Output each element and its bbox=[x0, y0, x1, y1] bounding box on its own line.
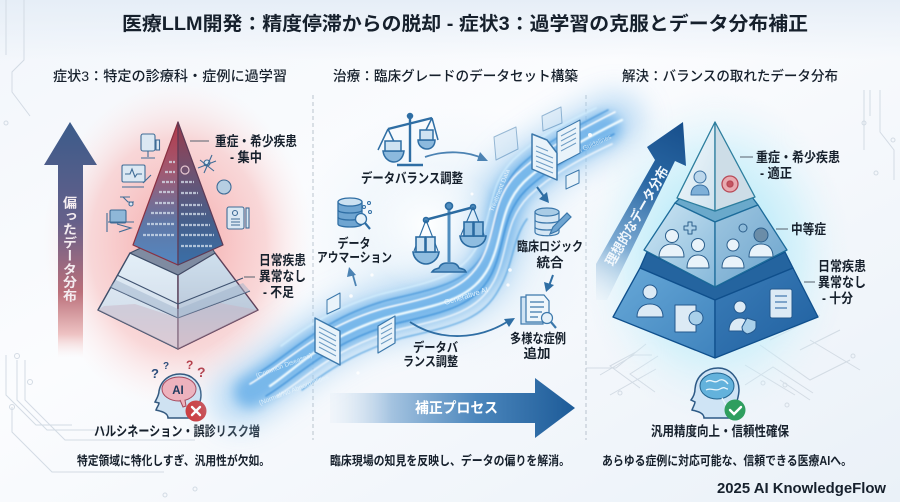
icon: AI brain with error: ? bbox=[163, 361, 169, 372]
label: common diseases balanced: 異常なし bbox=[818, 275, 866, 290]
arrow: skewed data distribution: 偏ったデータ分布 bbox=[62, 195, 78, 303]
arrow: document to logic bbox=[537, 187, 549, 203]
arrow: flow to cases bbox=[410, 318, 515, 336]
arrow: logic to cases bbox=[544, 275, 554, 292]
cyan glow bbox=[580, 90, 850, 420]
icon: AI brain with error: AI bbox=[172, 385, 184, 397]
top tier bbox=[677, 122, 755, 211]
panel: resolution bbox=[580, 68, 866, 468]
label: clinical logic integration: 統合 bbox=[536, 255, 564, 270]
icon: database with pencil bbox=[535, 208, 571, 236]
title: 医療LLM開発：精度停滞からの脱却 - 症状3：過学習の克服とデータ分布補正 bbox=[122, 12, 808, 35]
icon: central scales bbox=[413, 202, 486, 272]
ribbon captions: (Normal/No Abnormalities bbox=[258, 374, 331, 407]
middle tier bbox=[644, 197, 787, 287]
label: data balance adjustment top: データバランス調整 bbox=[361, 170, 463, 186]
arrow: skewed data distribution bbox=[44, 122, 97, 358]
label: severe rare diseases balanced bbox=[740, 149, 840, 181]
icon: top scales bbox=[378, 114, 438, 165]
label: common diseases balanced: - 十分 bbox=[822, 290, 853, 306]
label: clinical logic integration bbox=[517, 239, 583, 270]
pyramid: balanced bbox=[613, 122, 818, 358]
arrow: correction process bbox=[330, 378, 575, 438]
summary: treatment: 臨床現場の知見を反映し、データの偏りを解消。 bbox=[330, 453, 570, 468]
summary: symptom: 特定領域に特化しすぎ、汎用性が欠如。 bbox=[77, 453, 270, 468]
icon: healthy brain with check bbox=[691, 368, 746, 420]
arrow: up to augmentation bbox=[347, 267, 356, 286]
upper tier bbox=[133, 122, 223, 265]
panel: treatment bbox=[240, 68, 622, 468]
label: data augmentation: データ bbox=[338, 236, 370, 251]
label: common diseases: 異常なし bbox=[259, 269, 306, 284]
heading: resolution: 解決：バランスの取れたデータ分布 bbox=[622, 68, 838, 84]
icon: data augmentation database bbox=[338, 198, 372, 229]
documents upper right bbox=[494, 107, 580, 189]
label: data balance adjustment bottom bbox=[403, 340, 458, 369]
label: common diseases: - 不足 bbox=[263, 285, 294, 300]
lower tier bbox=[98, 245, 258, 349]
pyramid: skewed bbox=[98, 122, 258, 349]
label: severe rare diseases bbox=[190, 133, 297, 165]
summary: resolution: あらゆる症例に対応可能な、信頼できる医療AIへ。 bbox=[602, 453, 852, 468]
label: add diverse cases: 多様な症例 bbox=[510, 331, 566, 346]
arrow: ideal data distribution bbox=[596, 122, 686, 300]
icon: document with magnifier bbox=[521, 295, 556, 328]
ribbon captions: Clinical Guidelines bbox=[561, 133, 613, 162]
arrow: ideal data distribution: 理想的なデータ分布 bbox=[602, 164, 672, 268]
label: clinical logic integration: 臨床ロジック bbox=[517, 239, 583, 254]
label: moderate bbox=[776, 221, 826, 237]
label: add diverse cases bbox=[510, 331, 566, 361]
arrow: correction process: 補正プロセス bbox=[415, 399, 498, 417]
icon: AI brain with error: ? bbox=[151, 366, 159, 381]
icon: AI brain with error: ? bbox=[197, 364, 206, 380]
icon: AI brain with error bbox=[151, 358, 206, 422]
label: add diverse cases: 追加 bbox=[524, 346, 550, 361]
ribbon captions: (Common Diseases) bbox=[255, 352, 313, 380]
ribbon captions: Generative AI bbox=[443, 285, 489, 307]
white glow behind central scales bbox=[356, 161, 500, 289]
data flow ribbon bbox=[240, 105, 622, 398]
caption: accuracy and reliability: 汎用精度向上・信頼性確保 bbox=[651, 423, 789, 439]
label: severe rare diseases: - 集中 bbox=[230, 149, 262, 165]
label: data augmentation bbox=[317, 236, 392, 265]
label: common diseases bbox=[244, 252, 306, 300]
heading: symptom: 症状3：特定の診療科・症例に過学習 bbox=[53, 68, 287, 84]
section divider lines bbox=[313, 95, 586, 440]
label: data balance adjustment bottom: ランス調整 bbox=[403, 354, 458, 369]
label: severe rare diseases balanced: - 適正 bbox=[760, 165, 792, 181]
label: severe rare diseases: 重症・希少疾患 bbox=[215, 133, 297, 149]
label: common diseases balanced: 日常疾患 bbox=[818, 258, 866, 274]
icons around pyramid bbox=[107, 134, 249, 232]
bottom tier bbox=[613, 252, 818, 358]
heading: treatment: 治療：臨床グレードのデータセット構築 bbox=[333, 68, 578, 84]
panel: symptom bbox=[43, 68, 313, 468]
icon: AI brain with error: ? bbox=[186, 358, 193, 372]
label: moderate: 中等症 bbox=[791, 221, 826, 237]
label: common diseases: 日常疾患 bbox=[259, 252, 306, 268]
label: severe rare diseases balanced: 重症・希少疾患 bbox=[756, 149, 840, 165]
ribbon captions: Treatment Data bbox=[488, 168, 512, 213]
arrow: scales to flow bbox=[425, 152, 488, 161]
label: data balance adjustment bottom: データバ bbox=[413, 340, 458, 355]
documents lower left bbox=[315, 293, 395, 365]
label: data augmentation: アウマーション bbox=[317, 250, 392, 265]
caption: hallucination risk: ハルシネーション・誤診リスク増 bbox=[94, 423, 260, 439]
ribbon captions bbox=[255, 133, 613, 407]
label: common diseases balanced bbox=[804, 258, 866, 306]
red glow bbox=[43, 80, 313, 410]
footer credit: 2025 AI KnowledgeFlow bbox=[717, 481, 887, 497]
